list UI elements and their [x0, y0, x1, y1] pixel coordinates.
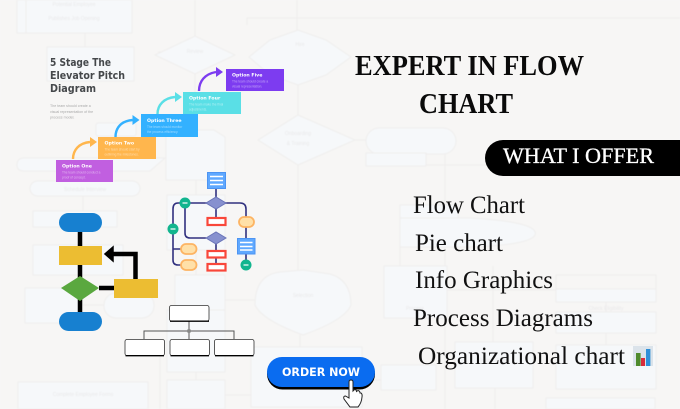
what I offer banner: WHAT I OFFER [503, 143, 654, 168]
stage: option one: proof of concept. [62, 176, 86, 180]
faint background flowchart: Schedule Interview [64, 187, 107, 193]
stage diagram description: visual representation of the [50, 110, 93, 114]
faint background flowchart: Potential Employee [52, 2, 96, 8]
stage diagram heading: 5 Stage The [50, 57, 111, 69]
offer list: Process Diagrams [413, 305, 593, 332]
stage: option four: adjustments. [189, 108, 207, 112]
faint background flowchart: Submit Forms [478, 358, 510, 364]
stage diagram heading [50, 57, 125, 95]
faint background flowchart: Complete Employee Forms [53, 392, 114, 398]
stage diagram heading: Diagram [50, 83, 96, 95]
stage diagram description [50, 104, 93, 120]
stage: option three: the process efficiency. [147, 130, 178, 134]
stage: option three: Option Three [147, 118, 182, 124]
stage: option five: The team should create a [232, 80, 268, 84]
stage diagram description: process model. [50, 116, 74, 120]
faint background flowchart: Process [406, 306, 425, 312]
basic flowchart [59, 213, 158, 331]
stage: option three: The team should monitor [147, 125, 183, 129]
icon: bar chart [633, 346, 653, 366]
stage diagram description: The team should create a [50, 104, 91, 108]
stage: option two: Option Two [104, 140, 135, 146]
stage: option four [183, 67, 241, 114]
what I offer banner [485, 140, 680, 176]
faint background flowchart: Publishes Job Opening [48, 16, 100, 22]
organisation chart [125, 306, 254, 356]
stage: option one [56, 137, 113, 182]
main title [355, 51, 584, 120]
faint background flowchart: Hire [295, 42, 305, 48]
stage: option one: Option One [62, 164, 92, 170]
stage: option five [226, 69, 284, 91]
order now button [267, 357, 375, 390]
faint background flowchart: Check Eligibility [588, 306, 624, 312]
offer list: Flow Chart [413, 192, 525, 219]
faint background flowchart: Funnel [188, 311, 204, 317]
faint background flowchart: Onboarding [285, 131, 311, 137]
main title: EXPERT IN FLOW [355, 51, 584, 82]
stage: option two [98, 115, 156, 159]
main title: CHART [419, 89, 513, 120]
stage: option two: The team should start by [104, 148, 140, 152]
icon: pointer hand [344, 380, 362, 407]
offer list: Info Graphics [415, 267, 553, 294]
colourful flowchart [168, 172, 255, 270]
stage: option four: The team make the final [189, 102, 223, 106]
stage: option three [141, 92, 198, 137]
stage: option five: visual representation. [232, 84, 262, 88]
stage: option five: Option Five [232, 72, 262, 78]
stage: option four: Option Four [189, 96, 221, 102]
offer list: Pie chart [415, 230, 503, 257]
faint background flowchart: Selection [293, 293, 313, 299]
order now button: ORDER NOW [282, 365, 360, 379]
faint background flowchart: Review [187, 49, 204, 55]
faint background flowchart: & Training [287, 141, 309, 147]
stage diagram heading: Elevator Pitch [50, 70, 125, 82]
offer list [413, 192, 625, 370]
offer list: Organizational chart [418, 343, 625, 370]
stage: option two: outlining the milestones. [104, 152, 139, 156]
stage: option one: The team should conduct a [62, 170, 101, 174]
